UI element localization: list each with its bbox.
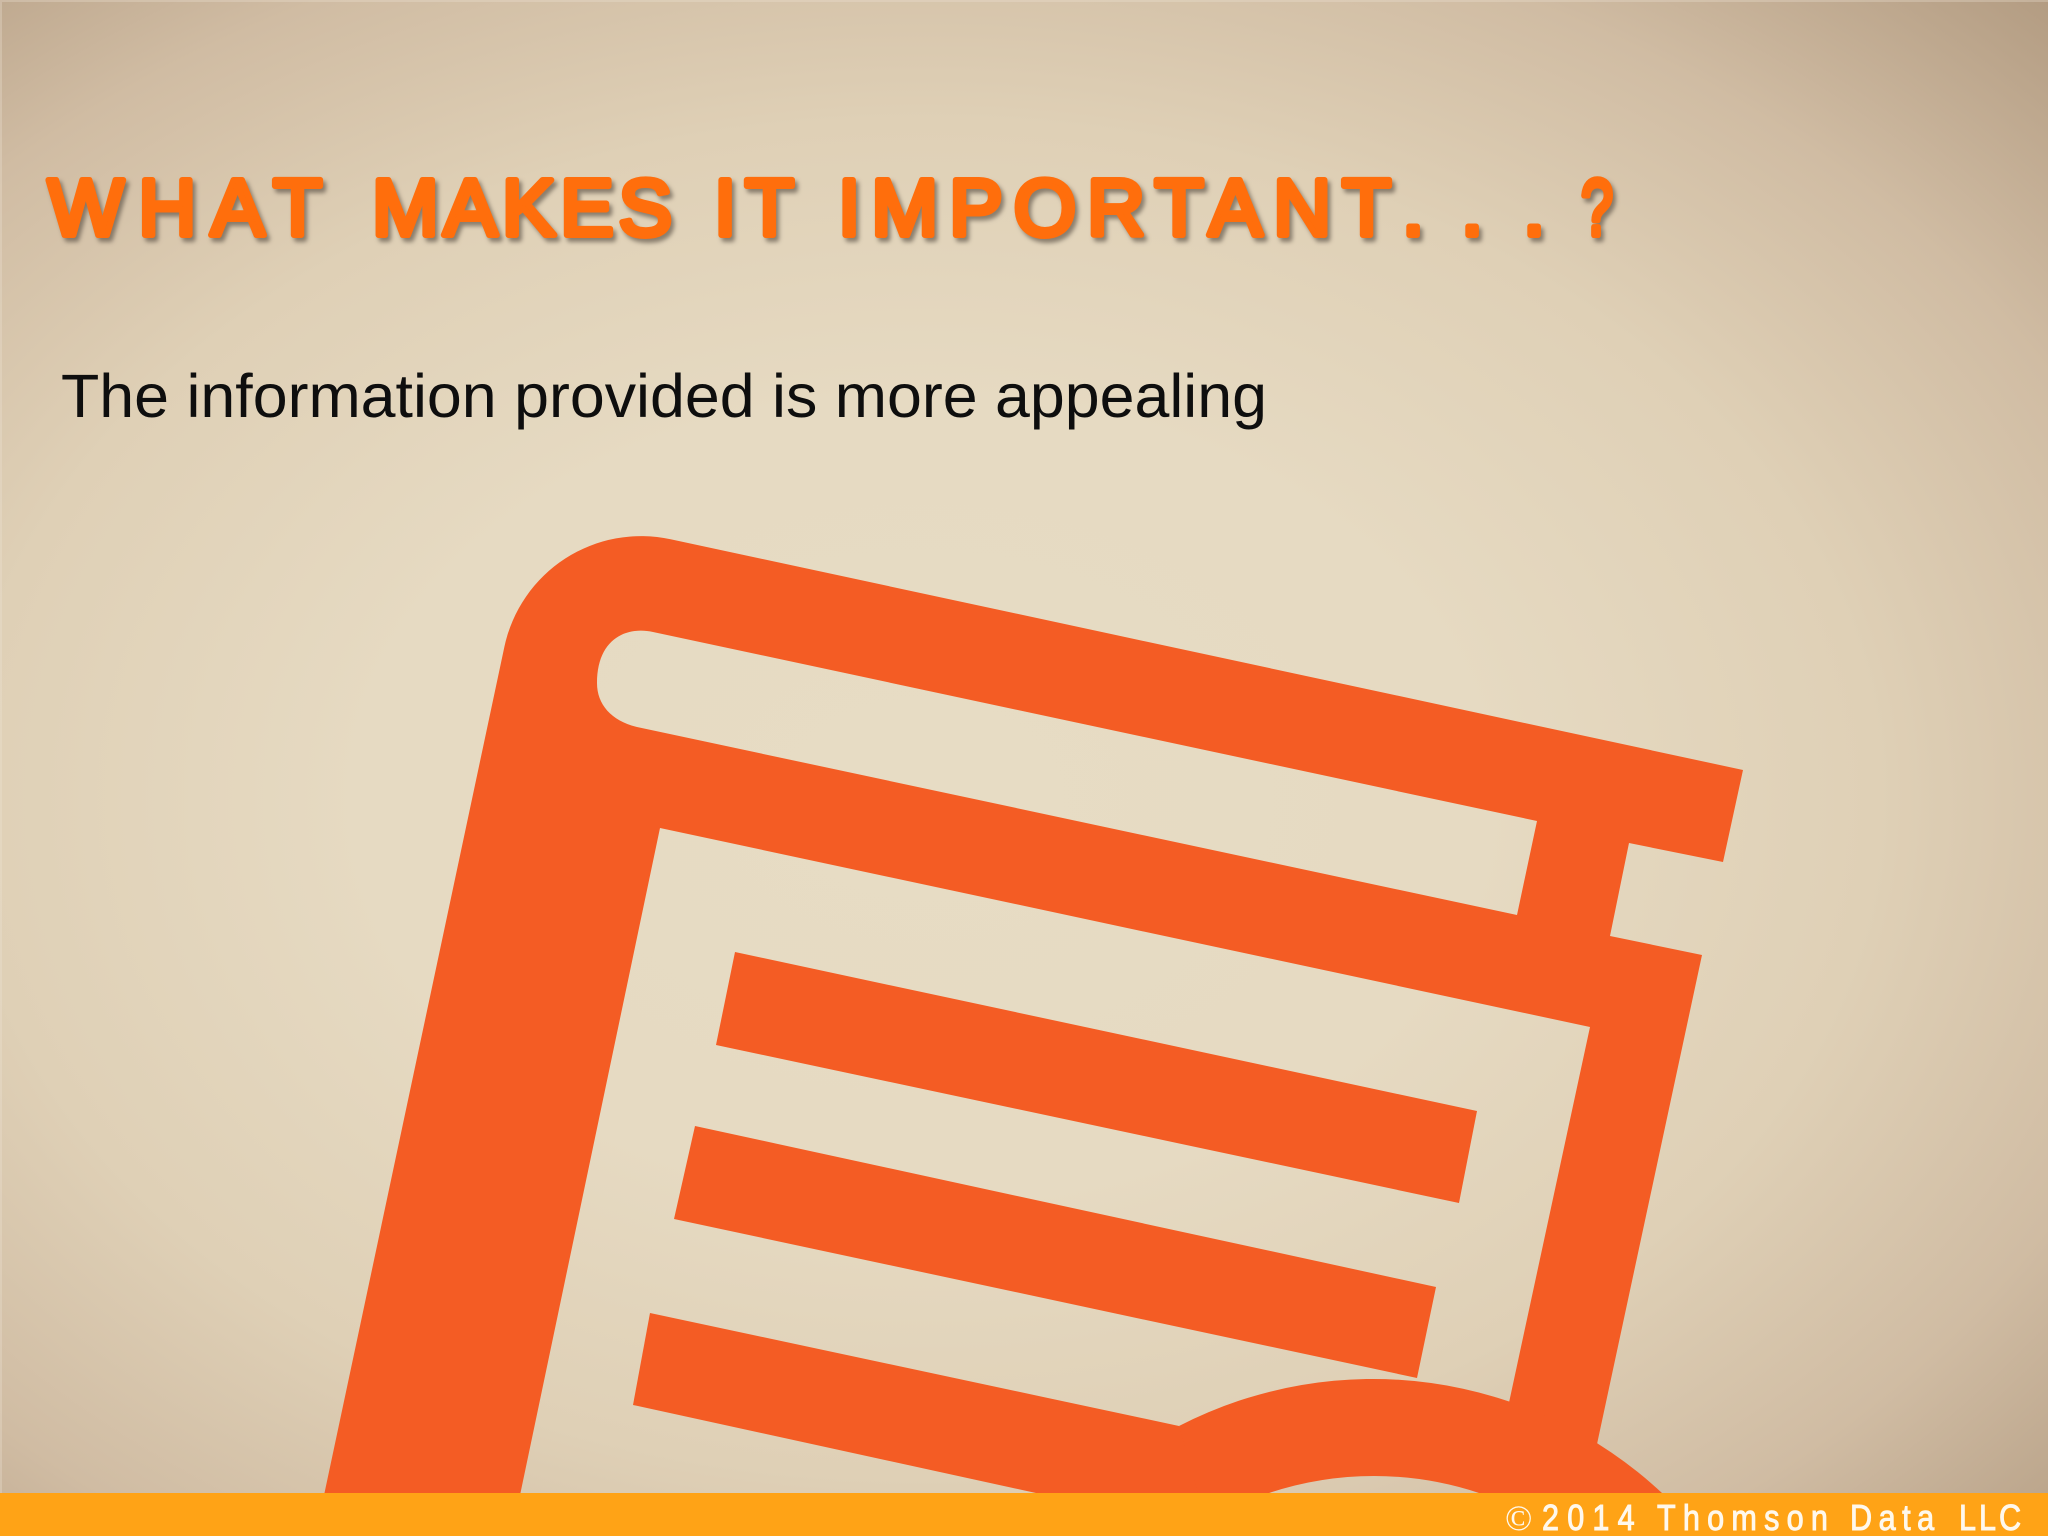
subtitle text: The information provided is more appealing — [61, 362, 1267, 430]
title: . — [1523, 163, 1545, 252]
book cover and spine — [323, 536, 1743, 1500]
magnifying glass ring — [1179, 1379, 1672, 1500]
title — [48, 163, 1613, 252]
title: ? — [1581, 163, 1613, 252]
title: MAKES — [372, 163, 672, 252]
copyright text — [1505, 1498, 2021, 1536]
text line 2 — [674, 1126, 1436, 1378]
title: WHAT — [48, 163, 322, 252]
icon: book with magnifying glass — [323, 536, 1743, 1500]
footer bar — [0, 1493, 2048, 1536]
text line 1 — [716, 952, 1477, 1203]
title: . — [1461, 163, 1483, 252]
text line 3 — [633, 1313, 1210, 1500]
title: IT — [714, 163, 794, 252]
title: IMPORTANT — [838, 163, 1391, 252]
title: . — [1402, 163, 1424, 252]
